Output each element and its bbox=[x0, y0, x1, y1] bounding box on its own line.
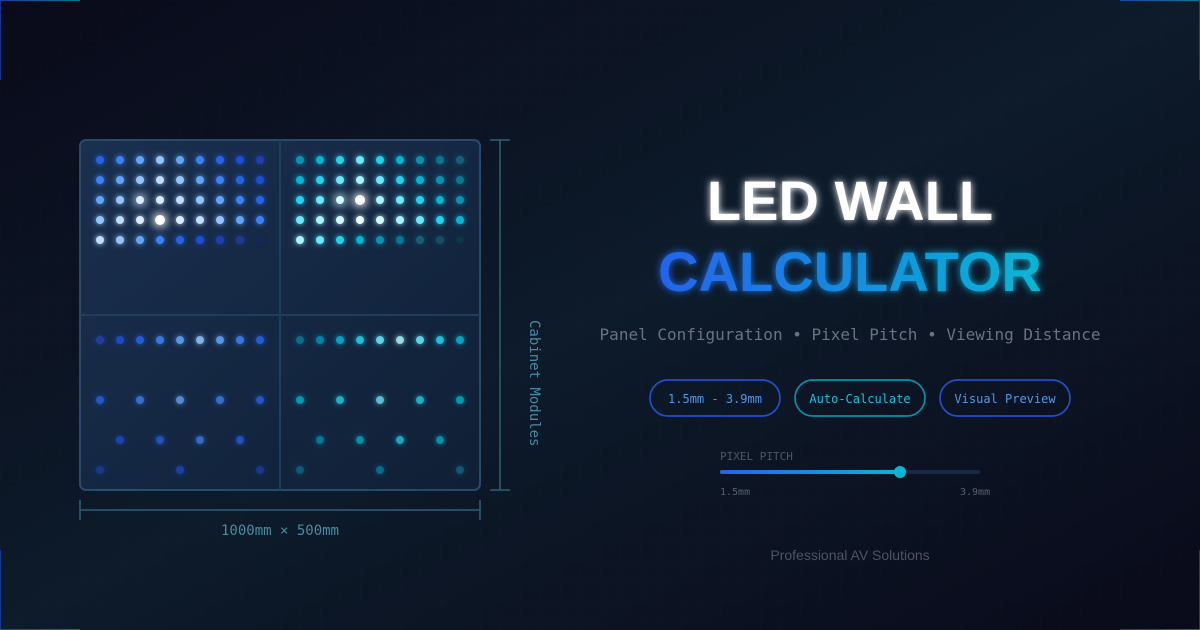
subtitle: Panel Configuration • Pixel Pitch • Viewing Distance bbox=[600, 325, 1100, 344]
slider label: PIXEL PITCH bbox=[720, 450, 793, 463]
width dimension line bbox=[80, 500, 480, 520]
title line 2: CALCULATOR bbox=[658, 240, 1042, 303]
slider max: 3.9mm bbox=[960, 487, 990, 498]
slider min: 1.5mm bbox=[720, 487, 750, 498]
pill: auto-calculate bbox=[795, 380, 925, 416]
brightest dot bbox=[355, 195, 365, 205]
pill: visual preview bbox=[940, 380, 1070, 416]
panel frame bbox=[80, 140, 480, 490]
pill: range: 1.5mm - 3.9mm bbox=[668, 392, 762, 406]
title line 1: LED WALL bbox=[707, 169, 993, 232]
width label: 1000mm × 500mm bbox=[221, 523, 339, 539]
slider fill bbox=[720, 470, 900, 474]
pill: auto-calculate: Auto-Calculate bbox=[809, 392, 911, 406]
LED wall panel bbox=[80, 140, 480, 490]
footer: Professional AV Solutions bbox=[770, 547, 930, 563]
module: top-right dots bbox=[296, 156, 464, 244]
slider knob bbox=[894, 466, 906, 478]
module: bottom-left dots bbox=[96, 336, 264, 474]
brightest dot bbox=[155, 215, 165, 225]
height label: Cabinet Modules bbox=[526, 320, 542, 446]
height dimension line bbox=[490, 140, 510, 490]
slider track bbox=[720, 470, 980, 474]
slider bbox=[720, 450, 990, 498]
bright dot bbox=[136, 196, 144, 204]
module: top-left dots bbox=[96, 156, 264, 244]
module dividers bbox=[80, 140, 480, 490]
bright dot bbox=[336, 196, 344, 204]
module: bottom-right dots bbox=[296, 336, 464, 474]
pill: visual preview: Visual Preview bbox=[954, 392, 1056, 406]
pill: range bbox=[650, 380, 780, 416]
